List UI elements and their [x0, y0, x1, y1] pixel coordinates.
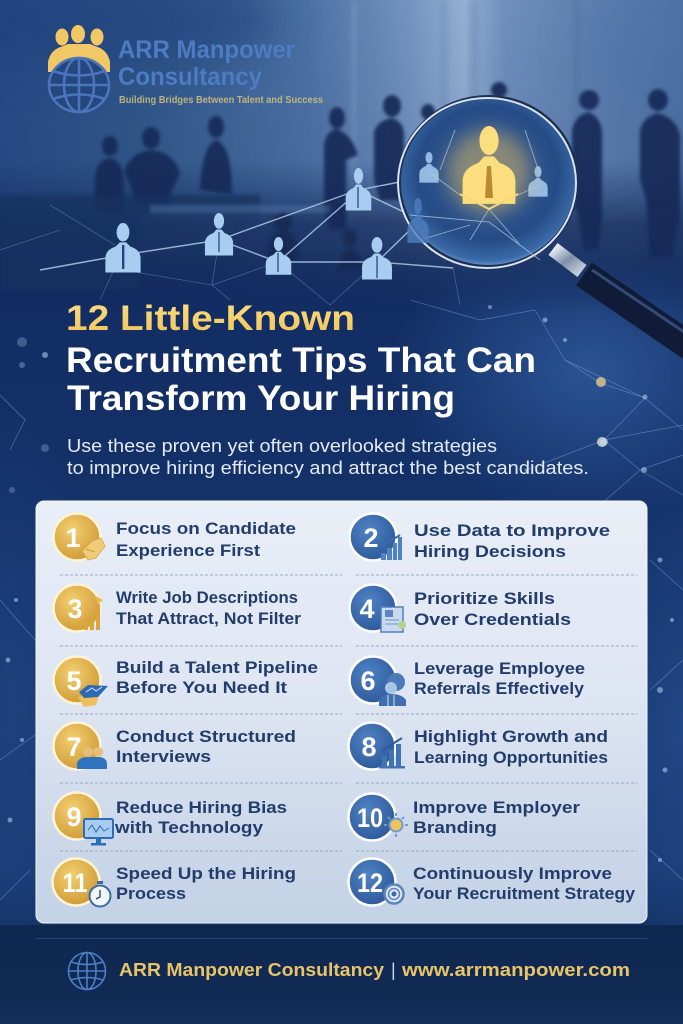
badge 3 [54, 584, 100, 632]
badge 9: 9 [66, 802, 82, 832]
icon: gears target [384, 884, 404, 904]
tip 6 text: Leverage Employee [414, 659, 585, 678]
footer company name: ARR Manpower Consultancy [119, 960, 384, 980]
tip 6 [350, 656, 585, 706]
panel: recruitment tips [36, 501, 647, 923]
tip 1 text [116, 519, 296, 560]
tip 10 [348, 794, 580, 840]
tip 1 text: Experience First [116, 541, 260, 560]
badge 7 [54, 722, 100, 770]
tip 11 [52, 858, 296, 906]
badge 4 [350, 584, 396, 632]
tip 9 [54, 792, 287, 846]
badge 8: 8 [361, 732, 377, 762]
tip 2 text [414, 521, 610, 561]
badge 2 [350, 514, 396, 560]
tip 6 text [414, 659, 585, 698]
tip 8 text [414, 727, 608, 767]
tip 6 text: Referrals Effectively [414, 679, 585, 698]
subtitle line 2: to improve hiring efficiency and attract the best candidates. [67, 458, 589, 478]
badge 11 [52, 858, 100, 906]
tip 12 [348, 858, 636, 906]
tip 7 text [116, 727, 296, 766]
icon: handshake [82, 538, 105, 560]
badge 1: 1 [65, 523, 81, 553]
title line 2: Recruitment Tips That Can [66, 341, 536, 380]
icon: person node 1 [105, 223, 141, 273]
subtitle line 1: Use these proven yet often overlooked strategies [67, 436, 497, 456]
logo tagline: Building Bridges Between Talent and Success [119, 95, 323, 106]
logo name line 1: ARR Manpower [118, 36, 295, 64]
icon: monitor [84, 819, 113, 846]
icon: gold chart [78, 595, 103, 630]
icon: bar chart [381, 535, 402, 560]
badge 10: 10 [357, 803, 383, 833]
footer [0, 925, 683, 1024]
badge 7: 7 [66, 732, 82, 762]
silhouettes of business people [95, 82, 680, 258]
icon: interview people [77, 747, 107, 769]
tip 11 text: Process [116, 884, 186, 903]
badge 6 [350, 656, 396, 704]
tip 9 text: Reduce Hiring Bias [116, 798, 287, 817]
logo name line 2: Consultancy [118, 63, 262, 91]
hero photo: blurred office background [0, 0, 683, 320]
tip 11 text [116, 864, 296, 903]
tip 12 text: Your Recruitment Strategy [413, 884, 636, 903]
icon: hand with blue card [78, 685, 108, 707]
title [66, 299, 536, 418]
tip 7 text: Interviews [116, 747, 211, 766]
badge 9 [54, 792, 100, 840]
tip 2 [350, 514, 610, 561]
tip 10 text [413, 798, 580, 837]
tip 5 [54, 656, 318, 707]
title line 3: Transform Your Hiring [67, 379, 455, 418]
icon: document [381, 607, 406, 632]
tip 4 [350, 584, 571, 632]
tip 2 text: Use Data to Improve [414, 521, 610, 540]
icon: growth chart [379, 738, 405, 768]
badge 11: 11 [62, 868, 88, 898]
network connection lines [40, 182, 453, 270]
badge 4: 4 [359, 594, 375, 624]
tip 12 text: Continuously Improve [413, 864, 612, 883]
icon: person node 4 [346, 168, 371, 210]
tip 9 text: with Technology [114, 818, 264, 837]
tip 4 text: Over Credentials [414, 610, 571, 629]
icon: magnifying glass [398, 97, 683, 348]
tip 3 text: That Attract, Not Filter [116, 610, 302, 628]
footer separator: | [391, 960, 396, 980]
tip 9 text [114, 798, 287, 837]
badge 5: 5 [66, 666, 82, 696]
tip 1 [54, 514, 296, 560]
tip 5 text: Before You Need It [116, 678, 287, 697]
title line gold: 12 Little-Known [66, 299, 355, 338]
icon: logo people and globe [48, 25, 110, 112]
footer website: www.arrmanpower.com [401, 960, 630, 980]
badge 6: 6 [360, 666, 376, 696]
badge 5 [54, 656, 100, 704]
badge 12 [348, 858, 396, 906]
tip 10 text: Improve Employer [413, 798, 580, 817]
badge 3: 3 [67, 594, 83, 624]
tip 11 text: Speed Up the Hiring [116, 864, 296, 883]
office table silhouette [0, 195, 362, 290]
tip 7 [54, 722, 296, 770]
tip 12 text [413, 864, 636, 903]
tip 7 text: Conduct Structured [116, 727, 296, 746]
tip 8 text: Highlight Growth and [414, 727, 608, 746]
tip 8 text: Learning Opportunities [414, 748, 608, 767]
icon: stopwatch [90, 881, 110, 906]
badge 1 [54, 514, 100, 560]
tip 3 text [116, 589, 302, 628]
icon: referral people [379, 673, 406, 706]
badge 8 [348, 722, 396, 770]
logo: ARR Manpower Consultancy [48, 25, 323, 112]
tip 1 text: Focus on Candidate [116, 519, 296, 538]
tip 4 text [414, 589, 571, 629]
icon: person node 3 [266, 237, 291, 275]
icon: person node 5 [362, 237, 392, 279]
icon: magnifier lens [398, 97, 577, 268]
icon: network person nodes [105, 168, 392, 279]
tip 2 text: Hiring Decisions [414, 542, 566, 561]
tip 3 text: Write Job Descriptions [116, 589, 298, 607]
badge 10 [348, 794, 396, 840]
icon: magnifier handle [553, 249, 683, 348]
badge 12: 12 [357, 868, 383, 898]
subtitle [67, 436, 589, 478]
tip 8 [348, 722, 608, 770]
icon: light bulb [384, 813, 408, 837]
icon: footer globe [68, 952, 106, 990]
tip 5 text [116, 658, 318, 697]
badge 2: 2 [363, 523, 379, 553]
tip 5 text: Build a Talent Pipeline [116, 658, 318, 677]
tip 3 [54, 584, 302, 632]
icon: person node 2 [205, 213, 233, 255]
tip 4 text: Prioritize Skills [414, 589, 555, 608]
tip 10 text: Branding [413, 818, 497, 837]
